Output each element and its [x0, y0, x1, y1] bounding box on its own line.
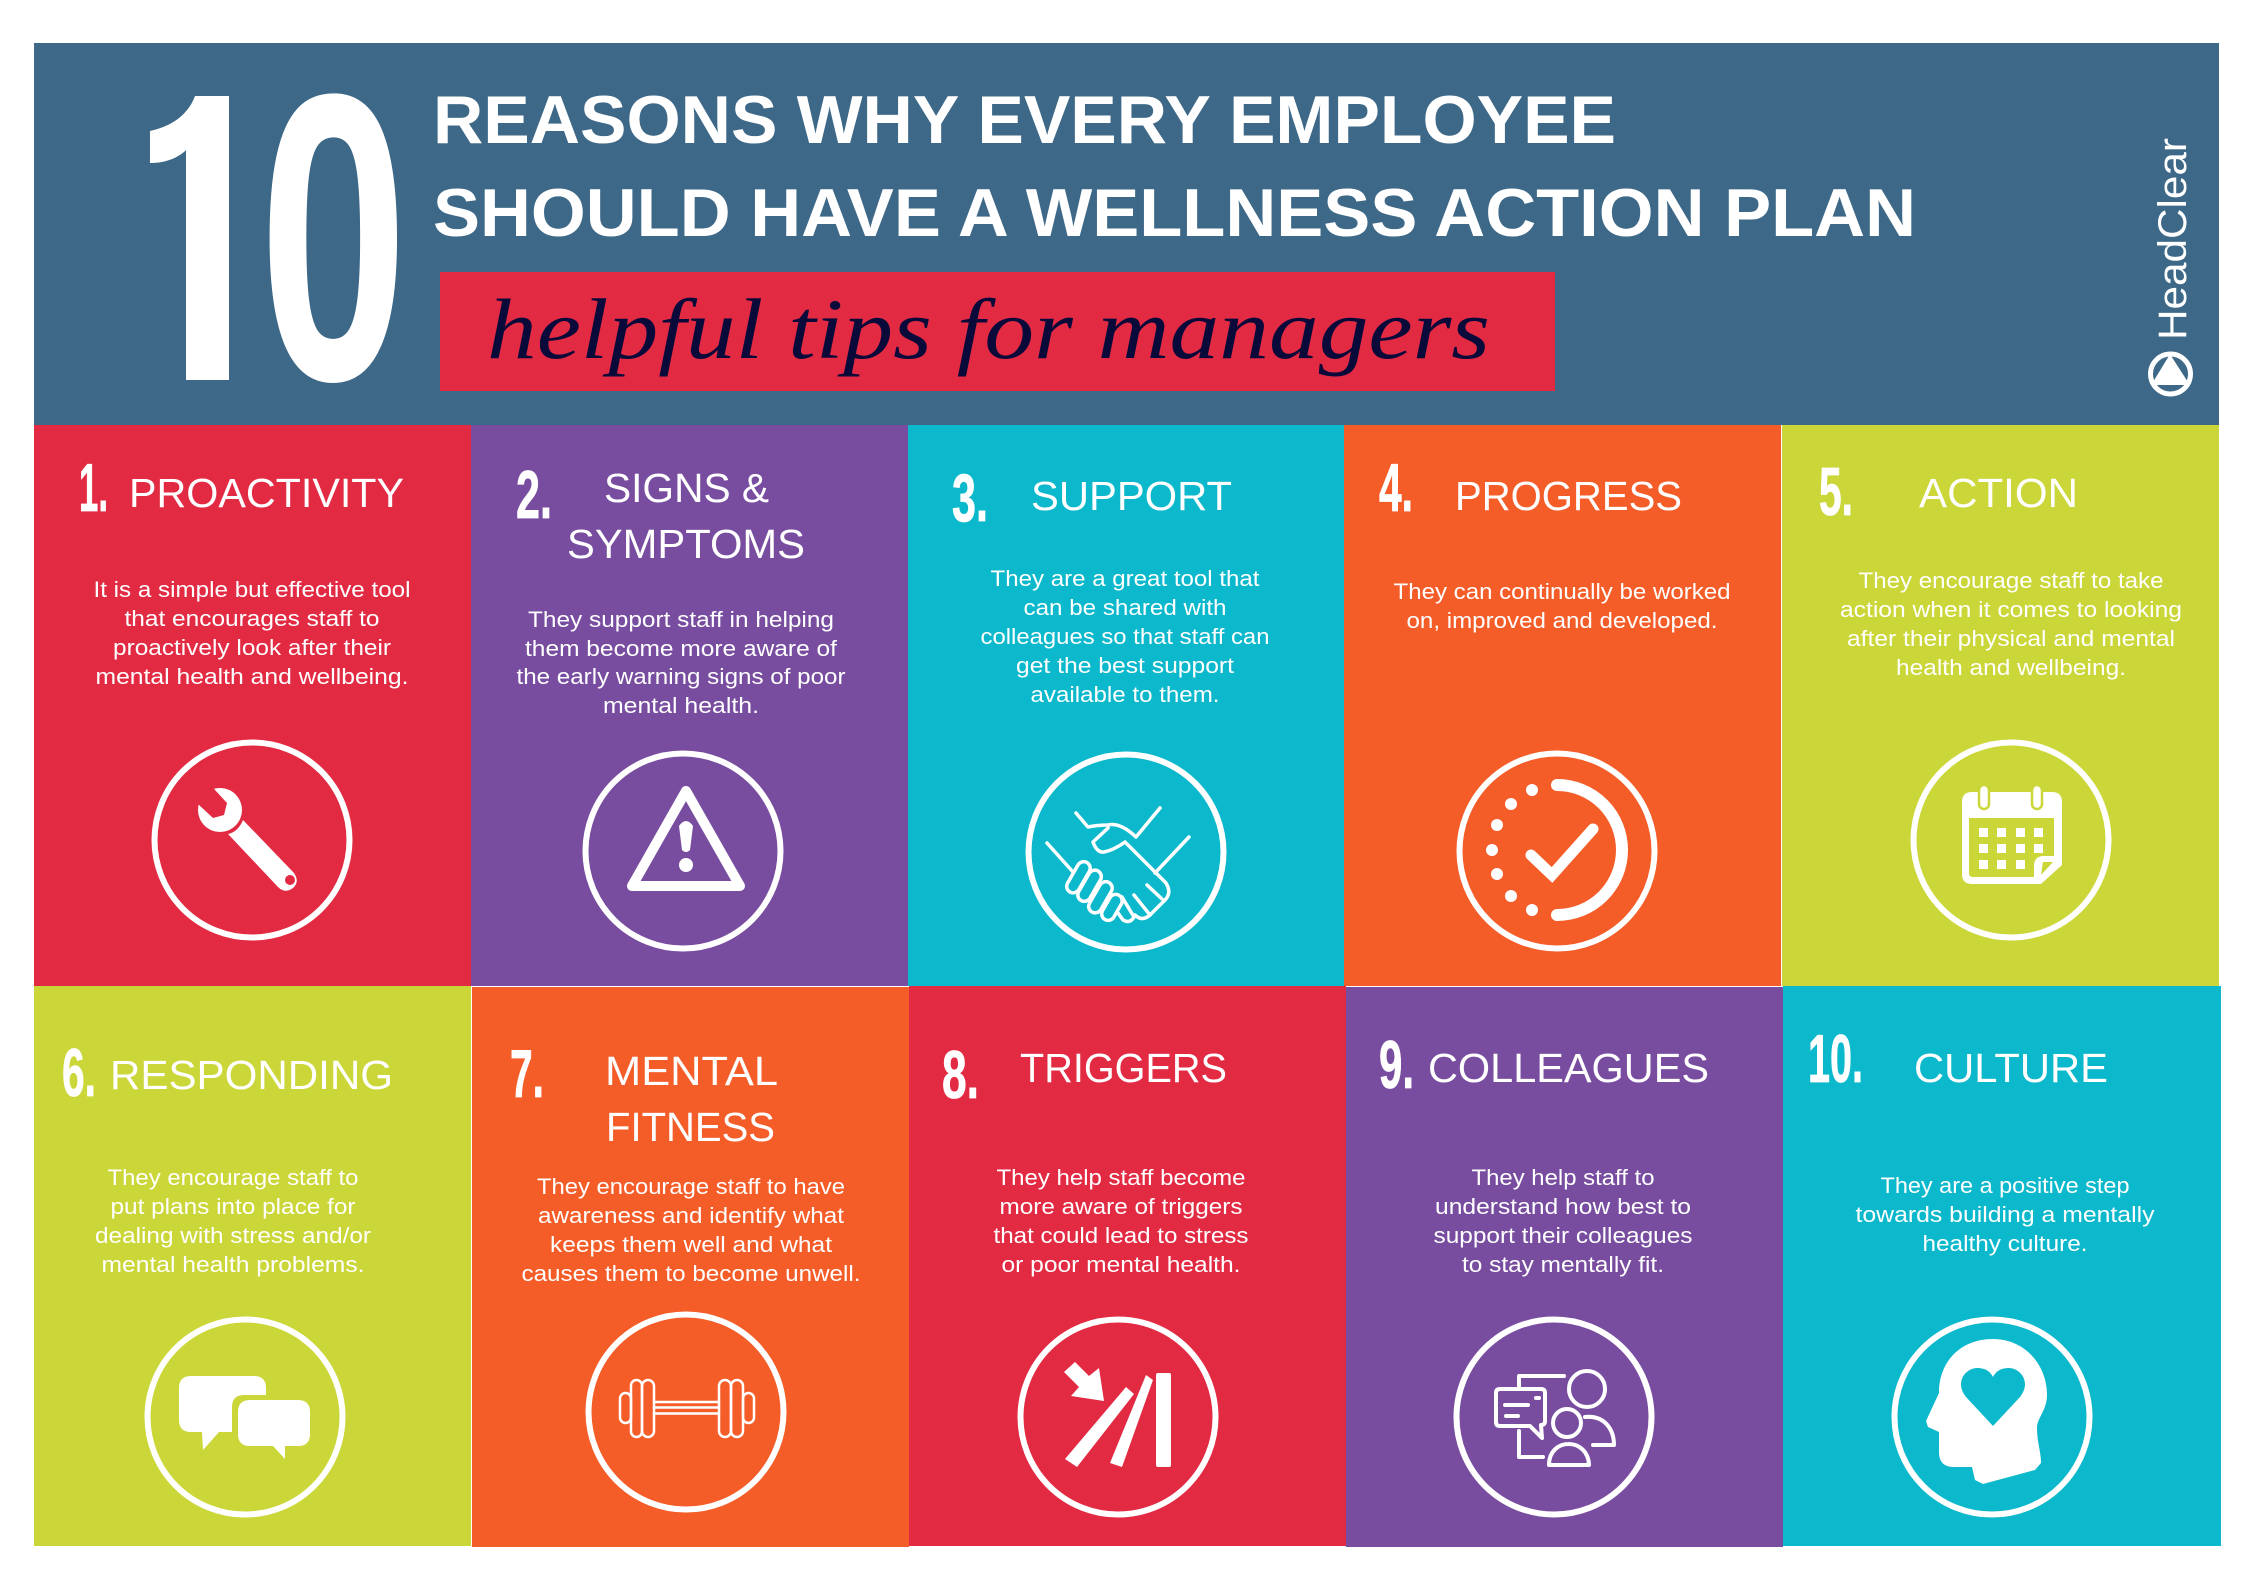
body text: They help staff become: [996, 1165, 1246, 1190]
body text: that could lead to stress: [994, 1223, 1248, 1248]
big number 10: [150, 93, 397, 383]
title: [433, 82, 1916, 251]
icon: wrench: [154, 742, 350, 938]
subtitle ribbon: helpful tips for managers: [487, 281, 1490, 377]
body text: towards building a mentally: [1856, 1202, 2154, 1227]
body text: that encourages staff to: [124, 606, 380, 631]
panel: 9 colleagues: [1346, 987, 1783, 1547]
title: REASONS WHY EVERY EMPLOYEE: [433, 82, 1616, 158]
body text: to stay mentally fit.: [1462, 1252, 1664, 1277]
big number 10: 1: [140, 13, 265, 466]
number 8: 8.: [942, 1037, 979, 1113]
panel: 1 proactivity: [34, 425, 471, 986]
heading: [605, 1048, 778, 1150]
heading: [567, 465, 805, 567]
panel: 7 mental fitness: [472, 987, 909, 1547]
body text: or poor mental health.: [1002, 1252, 1240, 1277]
icon: people talking: [1456, 1320, 1652, 1514]
heading: SUPPORT: [1031, 473, 1232, 519]
body text: more aware of triggers: [1000, 1194, 1242, 1219]
icon: head with heart: [1894, 1320, 2090, 1514]
body text: [980, 566, 1270, 707]
heading: PROGRESS: [1455, 473, 1682, 519]
panel: 3 support: [908, 425, 1344, 986]
body text: health and wellbeing.: [1896, 655, 2126, 680]
body text: mental health and wellbeing.: [96, 664, 408, 689]
body text: [994, 1165, 1248, 1277]
body text: support their colleagues: [1434, 1223, 1692, 1248]
heading: ACTION: [1919, 470, 2078, 516]
number 10: 10.: [1808, 1021, 1863, 1097]
body text: dealing with stress and/or: [95, 1223, 371, 1248]
heading: MENTAL: [605, 1048, 778, 1094]
body text: after their physical and mental: [1847, 626, 2175, 651]
number 7: 7.: [510, 1036, 544, 1112]
heading: SYMPTOMS: [567, 521, 805, 567]
subtitle ribbon: [440, 272, 1555, 391]
body text: on, improved and developed.: [1406, 608, 1718, 633]
body text: [522, 1174, 860, 1286]
body text: awareness and identify what: [538, 1203, 844, 1228]
heading: SIGNS &: [604, 465, 769, 511]
body text: available to them.: [1030, 682, 1220, 707]
body text: keeps them well and what: [550, 1232, 832, 1257]
body text: They encourage staff to have: [537, 1174, 845, 1199]
body text: mental health problems.: [102, 1252, 364, 1277]
body text: They are a great tool that: [990, 566, 1260, 591]
icon: trigger arrow and bars: [1020, 1320, 1216, 1514]
panel: 2 signs and symptoms: [471, 425, 908, 986]
number 1: 1.: [79, 450, 108, 526]
body text: [94, 577, 410, 689]
body text: action when it comes to looking: [1840, 597, 2182, 622]
icon: dumbbell: [588, 1314, 784, 1510]
big number 10: 0: [259, 9, 408, 466]
panel: 6 responding: [34, 986, 471, 1546]
body text: proactively look after their: [113, 635, 391, 660]
number 4: 4.: [1379, 450, 1413, 526]
body text: [95, 1165, 371, 1277]
panel: 8 triggers: [909, 986, 1346, 1546]
body text: They encourage staff to take: [1858, 568, 2164, 593]
header banner: [34, 43, 2219, 425]
body text: can be shared with: [1024, 595, 1226, 620]
body text: colleagues so that staff can: [980, 624, 1270, 649]
body text: They support staff in helping: [528, 607, 834, 632]
body text: [1394, 579, 1730, 633]
heading: FITNESS: [606, 1104, 775, 1150]
body text: [1434, 1165, 1692, 1277]
heading: RESPONDING: [110, 1052, 393, 1098]
panel: 4 progress: [1344, 425, 1781, 986]
panel: 10 culture: [1783, 986, 2221, 1546]
body text: It is a simple but effective tool: [94, 577, 410, 602]
heading: CULTURE: [1914, 1045, 2108, 1091]
body text: [1856, 1173, 2154, 1256]
number 6: 6.: [62, 1035, 96, 1111]
number 2: 2.: [516, 457, 552, 533]
heading: PROACTIVITY: [129, 470, 404, 516]
heading: TRIGGERS: [1020, 1045, 1227, 1091]
number 3: 3.: [952, 460, 988, 536]
body text: healthy culture.: [1922, 1231, 2088, 1256]
title: SHOULD HAVE A WELLNESS ACTION PLAN: [433, 175, 1916, 251]
icon: checkmark progress dial: [1460, 754, 1654, 948]
panel: 5 action: [1782, 425, 2219, 986]
body text: get the best support: [1016, 653, 1234, 678]
body text: They are a positive step: [1880, 1173, 2130, 1198]
body text: They can continually be worked: [1394, 579, 1730, 604]
body text: them become more aware of: [525, 636, 838, 661]
body text: mental health.: [603, 693, 759, 718]
body text: causes them to become unwell.: [522, 1261, 860, 1286]
logo: HeadClear: HeadClear: [2151, 138, 2195, 340]
body text: They encourage staff to: [108, 1165, 358, 1190]
heading: COLLEAGUES: [1428, 1045, 1709, 1091]
icon: warning triangle: [586, 754, 780, 948]
number 9: 9.: [1379, 1027, 1414, 1103]
body text: [516, 607, 846, 718]
icon: handshake: [1028, 754, 1224, 950]
body text: the early warning signs of poor: [516, 664, 846, 689]
body text: [1840, 568, 2182, 680]
number 5: 5.: [1819, 454, 1853, 530]
icon: calendar: [1914, 742, 2108, 938]
body text: put plans into place for: [110, 1194, 356, 1219]
icon: speech bubbles: [148, 1320, 342, 1514]
body text: understand how best to: [1435, 1194, 1691, 1219]
body text: They help staff to: [1472, 1165, 1654, 1190]
